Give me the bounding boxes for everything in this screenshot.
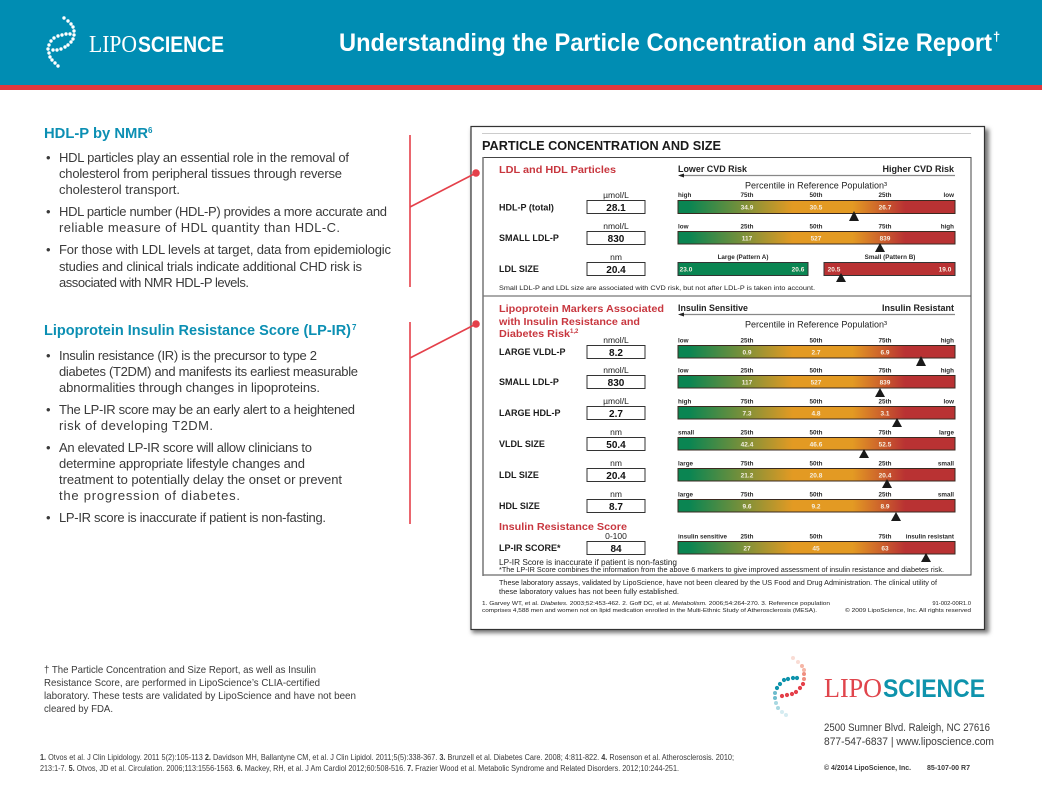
row: small LDL-P: 25th xyxy=(741,368,754,374)
text block: LP-IR bullets xyxy=(46,348,358,525)
panel heading: Lipoprotein Markers: Lipoprotein Markers Associated xyxy=(499,303,664,315)
row: HDL-P total: 34.9 xyxy=(741,204,754,212)
footer logo wordmark: SCIENCE xyxy=(883,675,985,703)
row: small LDL-P: 830 xyxy=(608,378,625,389)
card references: 91-002-00R1.0 xyxy=(932,601,971,607)
note: LP-IR: LP-IR Score is inaccurate if patient is non-fasting xyxy=(499,558,677,567)
references xyxy=(40,753,734,773)
text block: HDL-P bullets: cholesterol transport. xyxy=(59,182,180,197)
card title: PARTICLE CONCENTRATION AND SIZE xyxy=(482,139,721,153)
row: large VLDL-P: nmol/L xyxy=(603,335,629,345)
row: VLDL size: VLDL SIZE xyxy=(499,439,545,449)
heading: Lipoprotein Insulin Resistance Score: 7 xyxy=(352,323,357,332)
row: LDL size: Large (Pattern A) xyxy=(718,254,768,261)
risk axis: insulin: Insulin Sensitive xyxy=(678,303,748,313)
row: HDL-P total: 28.1 xyxy=(606,203,626,214)
text block: LP-IR bullets: An elevated LP-IR score will allow clinicians to xyxy=(59,440,312,455)
row: small LDL-P: SMALL LDL-P xyxy=(499,377,559,387)
row: small LDL-P: 75th xyxy=(879,368,892,374)
row: large HDL-P xyxy=(499,396,955,427)
row: VLDL size: nm xyxy=(610,427,622,437)
risk axis: CVD xyxy=(678,164,955,192)
text block: HDL-P bullets xyxy=(46,150,392,290)
footnote: Resistance Score, are performed in LipoScience’s CLIA-certified xyxy=(44,677,320,689)
row: HDL-P total: 50th xyxy=(810,192,823,199)
contact details: 2500 Sumner Blvd. Raleigh, NC 27616 xyxy=(824,722,990,734)
row: HDL size: 8.7 xyxy=(609,502,623,513)
row: large VLDL-P: 0.9 xyxy=(742,350,752,356)
panel heading: Lipoprotein Markers: Diabetes Risk xyxy=(499,328,570,340)
text block: HDL-P bullets: For those with LDL levels at target, data from epidemiologic xyxy=(59,242,392,257)
text block: LP-IR bullets: diabetes (T2DM) and manifests its earliest measurable xyxy=(59,364,358,379)
text block: HDL-P bullets: • xyxy=(46,242,51,257)
panel heading: Lipoprotein Markers: with Insulin Resistance and xyxy=(498,316,640,328)
row: HDL-P total: 30.5 xyxy=(810,204,823,212)
text block: HDL-P bullets: • xyxy=(46,204,51,219)
heading: HDL-P by NMR: HDL-P by NMR xyxy=(44,125,148,142)
row: large HDL-P: 75th xyxy=(741,398,754,406)
row: LDL size: small xyxy=(938,460,954,468)
row: small LDL-P xyxy=(499,365,955,397)
disclaimer xyxy=(499,580,937,596)
row: small LDL-P: 839 xyxy=(880,236,891,242)
row: LDL size: 20.4 xyxy=(606,265,626,276)
row: VLDL size: 50th xyxy=(810,430,823,436)
row: small LDL-P: 527 xyxy=(811,236,822,242)
row: small LDL-P: 117 xyxy=(742,380,753,386)
row: VLDL size: small xyxy=(678,430,694,436)
row: LDL size: nm xyxy=(610,458,622,468)
row: small LDL-P: 50th xyxy=(810,368,823,374)
contact details: 85-107-00 R7 xyxy=(927,765,970,772)
row: large VLDL-P: 2.7 xyxy=(811,350,821,356)
references: 1. Otvos et al. J Clin Lipidology. 2011 5(2):105-113 2. Davidson MH, Ballantyne CM, et al. J Clin Lipidol. 2011;5(5):338-367. 3. Brunzell et al. Diabetes Care. 2008; 4:811-822. 4. Rosenson et al. Atherosclerosis. 2010; xyxy=(40,753,734,762)
row: LP-IR score: 50th xyxy=(810,534,823,540)
row: LP-IR score: insulin sensitive xyxy=(678,534,727,540)
row: large HDL-P: 2.7 xyxy=(609,409,623,420)
contact details: © 4/2014 LipoScience, Inc. xyxy=(824,764,911,772)
row: VLDL size: large xyxy=(939,430,954,436)
row: HDL-P total: HDL-P (total) xyxy=(499,202,554,212)
card references: © 2009 LipoScience, Inc. All rights reserved xyxy=(845,607,971,614)
row: HDL-P total: 75th xyxy=(741,192,754,199)
text block: LP-IR bullets: • xyxy=(46,348,51,363)
row: LDL size: 25th xyxy=(879,460,892,468)
text block: HDL-P bullets: HDL particle number (HDL-P) provides a more accurate and xyxy=(59,204,387,219)
risk axis: insulin xyxy=(678,303,955,330)
header band xyxy=(0,0,1042,90)
title: Understanding the Particle Concentration and Size Report xyxy=(339,29,993,57)
row: small LDL-P: low xyxy=(678,368,689,374)
row: small LDL-P: 527 xyxy=(811,380,822,386)
row: LDL size: 20.8 xyxy=(810,472,823,480)
row: LDL size xyxy=(499,458,955,488)
text block: LP-IR bullets: LP-IR score is inaccurate if patient is non-fasting. xyxy=(59,510,326,525)
row: LP-IR score: 45 xyxy=(812,546,820,552)
connector: LP-IR section to chart xyxy=(410,320,480,524)
text block: HDL-P bullets: HDL particles play an essential role in the removal of xyxy=(59,150,349,165)
row: HDL size: 75th xyxy=(741,492,754,498)
row: large VLDL-P: 50th xyxy=(810,338,823,344)
text block: LP-IR bullets: • xyxy=(46,440,51,455)
icon: white helix logo mark xyxy=(46,16,76,68)
text block: LP-IR bullets: abnormalities through changes in lipoproteins. xyxy=(59,380,320,395)
row: LDL size xyxy=(499,252,955,282)
row: VLDL size: 50.4 xyxy=(606,440,626,451)
row: large VLDL-P: high xyxy=(941,338,954,344)
text block: HDL-P bullets: reliable measure of HDL quantity than HDL-C. xyxy=(59,220,340,235)
row: LDL size: LDL SIZE xyxy=(499,264,539,274)
row: large VLDL-P: 6.9 xyxy=(880,350,890,356)
text block: LP-IR bullets: Insulin resistance (IR) is the precursor to type 2 xyxy=(59,348,317,363)
text block: LP-IR bullets: treatment to potentially delay the onset or prevent xyxy=(59,472,342,487)
row: HDL size: 50th xyxy=(810,492,823,498)
row: HDL-P total: high xyxy=(678,192,691,199)
row: LP-IR score: 0-100 xyxy=(605,531,627,541)
row: VLDL size: 52.5 xyxy=(879,442,892,448)
row: HDL-P total: low xyxy=(944,192,954,199)
footer logo wordmark: LIPO xyxy=(824,673,882,703)
row: HDL-P total xyxy=(499,190,955,221)
row: LP-IR score: insulin resistant xyxy=(906,534,955,540)
row: LDL size: large xyxy=(678,460,694,468)
row: large HDL-P: high xyxy=(678,398,691,406)
row: LDL size: 23.0 xyxy=(680,266,693,274)
footnote: cleared by FDA. xyxy=(44,703,113,715)
text block: LP-IR bullets: The LP-IR score may be an early alert to a heightened xyxy=(59,402,355,417)
text block: LP-IR bullets: determine appropriate lifestyle changes and xyxy=(59,456,305,471)
text block: LP-IR bullets: the progression of diabetes. xyxy=(59,488,240,503)
risk axis: insulin: Percentile in Reference Population³ xyxy=(745,320,887,330)
row: LDL size: 20.4 xyxy=(879,472,892,480)
row: small LDL-P: 839 xyxy=(880,380,891,386)
text block: HDL-P bullets: studies and clinical trials indicate additional CHD risk is xyxy=(59,259,362,274)
row: small LDL-P: 117 xyxy=(742,236,753,242)
row: large HDL-P: 3.1 xyxy=(880,410,890,418)
contact details xyxy=(824,722,994,772)
note: LP-IR xyxy=(499,558,944,574)
row: LDL size: 20.5 xyxy=(828,266,841,274)
row: HDL size: 9.2 xyxy=(811,504,821,510)
row: small LDL-P: low xyxy=(678,224,689,230)
panel heading: Lipoprotein Markers xyxy=(498,303,664,340)
row: HDL size xyxy=(499,489,955,521)
row: small LDL-P: high xyxy=(941,224,954,230)
references: 213:1-7. 5. Otvos, JD et al. Circulation. 2006;113:1556-1563. 6. Mackey, RH, et al. J Am Cardiol 2012;60:508-516. 7. Frazier Wood et al. Metabolic Syndrome and Related Disorders. 2012;10:244-251. xyxy=(40,764,679,773)
row: HDL size: small xyxy=(938,492,954,498)
footer logo wordmark xyxy=(824,673,985,703)
row: HDL size: HDL SIZE xyxy=(499,501,540,511)
row: small LDL-P: high xyxy=(941,368,954,374)
row: VLDL size xyxy=(499,427,955,458)
heading: Insulin Resistance Score: Insulin Resistance Score xyxy=(499,521,627,533)
row: small LDL-P xyxy=(499,221,955,252)
text block: LP-IR bullets: • xyxy=(46,510,51,525)
row: large HDL-P: 4.8 xyxy=(811,410,821,418)
text block: HDL-P bullets: • xyxy=(46,150,51,165)
risk axis: CVD: Higher CVD Risk xyxy=(882,164,955,174)
row: HDL size: nm xyxy=(610,489,622,499)
header logo wordmark: SCIENCE xyxy=(138,32,224,57)
row: small LDL-P: nmol/L xyxy=(603,365,629,375)
header logo wordmark xyxy=(89,32,224,58)
row: VLDL size: 25th xyxy=(741,430,754,436)
row: HDL-P total: 26.7 xyxy=(879,204,892,212)
row: large HDL-P: 7.3 xyxy=(742,410,752,418)
row: large HDL-P: 50th xyxy=(810,398,823,406)
heading: HDL-P by NMR: 6 xyxy=(148,126,153,135)
row: large HDL-P: 25th xyxy=(879,398,892,406)
row: large VLDL-P: 25th xyxy=(741,338,754,344)
text block: LP-IR bullets: • xyxy=(46,402,51,417)
note: LP-IR: *The LP-IR Score combines the information from the above 6 markers to give improved assessment of insulin resistance and diabetes risk. xyxy=(499,567,944,574)
panel heading: LDL and HDL Particles: LDL and HDL Particles xyxy=(499,164,616,176)
card references xyxy=(482,601,971,614)
row: LDL size: 75th xyxy=(741,460,754,468)
note: LDL panel: Small LDL-P and LDL size are associated with CVD risk, but not after LDL-P is taken into account. xyxy=(499,285,815,292)
row: small LDL-P: 50th xyxy=(810,224,823,230)
row: LP-IR score: 27 xyxy=(743,546,751,552)
row: LP-IR score: 84 xyxy=(610,544,622,555)
footnote: laboratory. These tests are validated by LipoScience and have not been xyxy=(44,690,356,702)
text block: LP-IR bullets: risk of developing T2DM. xyxy=(59,418,213,433)
row: LP-IR score: 25th xyxy=(741,534,754,540)
contact details: 877-547-6837 | www.liposcience.com xyxy=(824,736,994,748)
row: HDL-P total: 25th xyxy=(879,192,892,199)
row: large VLDL-P: 75th xyxy=(879,338,892,344)
row: LP-IR score: LP-IR SCORE* xyxy=(499,543,561,553)
row: large HDL-P: µmol/L xyxy=(603,396,629,406)
disclaimer: these laboratory values has not been fully established. xyxy=(499,589,679,596)
footnote: † The Particle Concentration and Size Report, as well as Insulin xyxy=(44,664,316,676)
row: LDL size: 20.6 xyxy=(792,266,805,274)
card references: 1. Garvey WT, et al. Diabetes. 2003;52:453-462. 2. Goff DC, et al. Metabolism. 2006;54:264-270. 3. Reference population xyxy=(482,601,830,607)
row: VLDL size: 75th xyxy=(879,430,892,436)
heading: Lipoprotein Insulin Resistance Score: Lipoprotein Insulin Resistance Score (LP-IR) xyxy=(44,322,351,339)
row: LDL size: LDL SIZE xyxy=(499,470,539,480)
row: LDL size: 50th xyxy=(810,460,823,468)
panel frame xyxy=(483,157,971,576)
row: HDL size: 9.6 xyxy=(742,504,752,510)
row: HDL size: large xyxy=(678,492,694,498)
risk axis: insulin: Insulin Resistant xyxy=(882,303,954,313)
row: HDL size: 25th xyxy=(879,492,892,498)
row: VLDL size: 42.4 xyxy=(741,442,754,448)
card: report sheet xyxy=(471,126,989,633)
row: large HDL-P: low xyxy=(944,398,954,406)
connector: HDL-P section to chart xyxy=(410,135,480,287)
row: small LDL-P: 25th xyxy=(741,224,754,230)
header logo wordmark: LIPO xyxy=(89,32,137,58)
row: large VLDL-P xyxy=(499,335,955,366)
row: HDL size: 8.9 xyxy=(880,504,890,510)
row: large HDL-P: LARGE HDL-P xyxy=(499,408,560,418)
title: † xyxy=(993,29,1000,44)
row: LDL size: 20.4 xyxy=(606,471,626,482)
risk axis: CVD: Lower CVD Risk xyxy=(678,164,748,174)
row: small LDL-P: SMALL LDL-P xyxy=(499,233,559,243)
footnote xyxy=(44,664,356,715)
row: small LDL-P: nmol/L xyxy=(603,221,629,231)
row: LP-IR score xyxy=(499,531,955,562)
text block: HDL-P bullets: associated with NMR HDL-P levels. xyxy=(59,275,249,290)
row: large VLDL-P: 8.2 xyxy=(609,348,623,359)
row: VLDL size: 46.6 xyxy=(810,442,823,448)
icon: color helix logo mark xyxy=(773,656,806,717)
row: LDL size: 21.2 xyxy=(741,472,754,480)
risk axis: CVD: Percentile in Reference Population³ xyxy=(745,180,887,192)
row: LDL size: Small (Pattern B) xyxy=(865,254,915,261)
card references: comprises 4,588 men and women not on lipid medication enrolled in the Multi-Ethnic Study of Atherosclerosis (MESA). xyxy=(482,608,817,614)
row: LP-IR score: 75th xyxy=(879,534,892,540)
row: HDL-P total: µmol/L xyxy=(603,190,629,200)
row: large VLDL-P: low xyxy=(678,338,689,344)
row: LDL size: nm xyxy=(610,252,622,262)
row: LP-IR score: 63 xyxy=(881,546,889,552)
row: small LDL-P: 75th xyxy=(879,224,892,230)
text block: HDL-P bullets: cholesterol from peripheral tissues through reverse xyxy=(59,166,342,181)
row: LDL size: 19.0 xyxy=(939,266,952,274)
panel heading: Lipoprotein Markers: 1,2 xyxy=(570,329,579,335)
row: large VLDL-P: LARGE VLDL-P xyxy=(499,347,566,357)
disclaimer: These laboratory assays, validated by LipoScience, have not been cleared by the US Food and Drug Administration. The clinical utility of xyxy=(499,580,937,587)
row: small LDL-P: 830 xyxy=(608,234,625,245)
